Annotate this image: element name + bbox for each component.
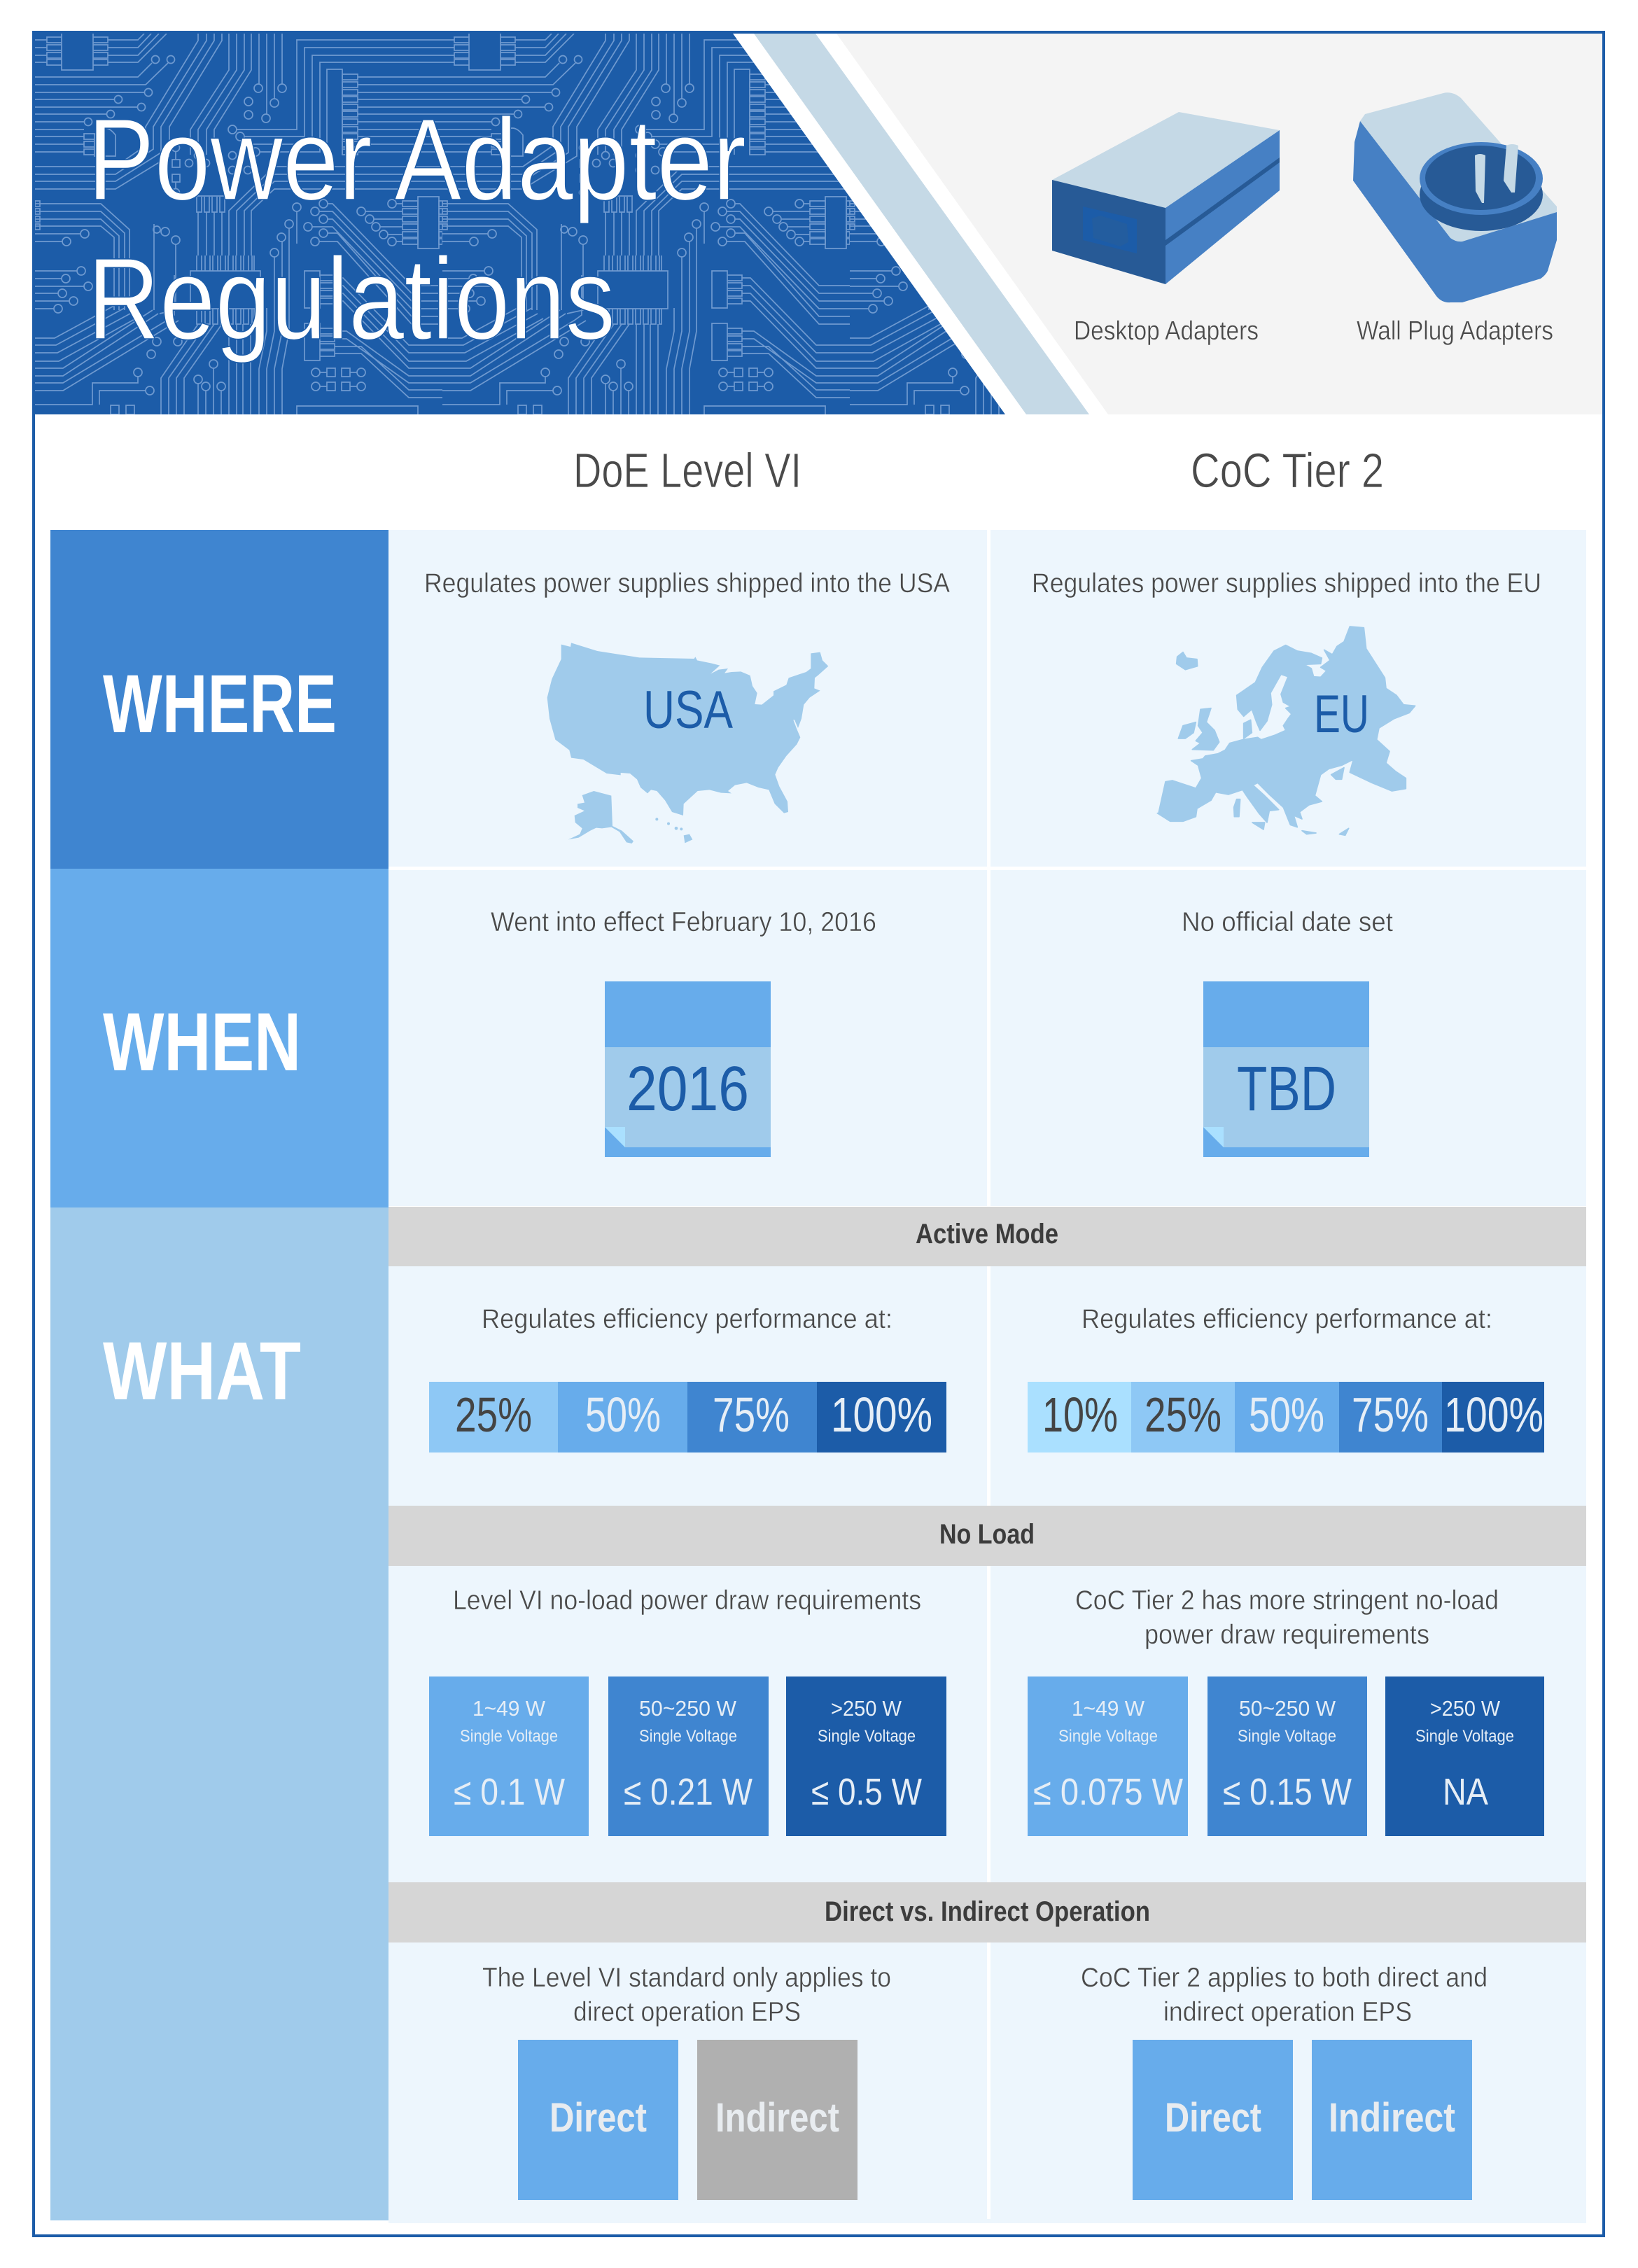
panel: where label xyxy=(50,530,388,869)
card: DoE direct: Direct xyxy=(550,2095,647,2141)
active text: CoC: Regulates efficiency performance at: xyxy=(1082,1304,1492,1334)
card: DoE 50-250 W: Single Voltage xyxy=(639,1727,737,1746)
white diagonal band xyxy=(733,34,1108,414)
card: CoC over 250 W: Single Voltage xyxy=(1415,1727,1514,1746)
card: CoC 50-250 W: ≤ 0.15 W xyxy=(1223,1771,1352,1813)
map: USA xyxy=(547,643,828,844)
column heading: DoE Level VI: DoE Level VI xyxy=(573,443,802,498)
header light panel xyxy=(35,34,1602,414)
chart: DoE load points: 50% xyxy=(585,1387,661,1442)
card: CoC direct xyxy=(1133,2040,1293,2200)
panel: what label: WHAT xyxy=(103,1325,301,1418)
card: DoE over 250 W: >250 W xyxy=(831,1696,902,1721)
circuit board background xyxy=(35,34,1005,414)
section bar: no load xyxy=(388,1506,1586,1566)
card: CoC 50-250 W: Single Voltage xyxy=(1238,1727,1336,1746)
icon: wall plug adapter xyxy=(1353,92,1557,302)
no-load text: CoC: power draw requirements xyxy=(1144,1620,1429,1650)
chart: CoC load points xyxy=(1028,1382,1544,1452)
card: CoC 1-49 W: 1~49 W xyxy=(1072,1696,1145,1721)
card: CoC over 250 W xyxy=(1385,1676,1544,1836)
map: EU xyxy=(1157,626,1415,835)
operation text: CoC: indirect operation EPS xyxy=(1163,1997,1412,2027)
card: CoC 1-49 W: Single Voltage xyxy=(1058,1727,1158,1746)
label: wall plug adapters: Wall Plug Adapters xyxy=(1357,316,1553,346)
operation text: DoE xyxy=(482,1963,891,2027)
when text: DoE: Went into effect February 10, 2016 xyxy=(491,907,876,937)
section bar: direct vs indirect xyxy=(388,1882,1586,1942)
operation text: CoC: CoC Tier 2 applies to both direct and xyxy=(1081,1963,1488,1993)
card: DoE 50-250 W: 50~250 W xyxy=(639,1696,737,1721)
icon: calendar 2016: 2016 xyxy=(626,1054,749,1124)
card: CoC 50-250 W xyxy=(1208,1676,1367,1836)
card: DoE over 250 W: ≤ 0.5 W xyxy=(811,1771,922,1813)
card: CoC 1-49 W: ≤ 0.075 W xyxy=(1033,1771,1183,1813)
where text: CoC: Regulates power supplies shipped into the EU xyxy=(1032,568,1541,598)
title: Power Adapter xyxy=(88,95,746,225)
card: CoC direct: Direct xyxy=(1165,2095,1261,2141)
section bar: no load: No Load xyxy=(939,1519,1035,1550)
chart: DoE load points xyxy=(429,1382,946,1452)
operation text: CoC xyxy=(1081,1963,1488,2027)
section bar: direct vs indirect: Direct vs. Indirect Operation xyxy=(825,1896,1150,1927)
title: Regulations xyxy=(88,234,615,364)
card: CoC over 250 W: NA xyxy=(1443,1771,1488,1813)
chart: CoC load points: 75% xyxy=(1352,1387,1429,1442)
active text: DoE: Regulates efficiency performance at: xyxy=(482,1304,892,1334)
card: CoC indirect: Indirect xyxy=(1329,2095,1455,2141)
where text: DoE: Regulates power supplies shipped into the USA xyxy=(424,568,950,598)
card: DoE 50-250 W: ≤ 0.21 W xyxy=(624,1771,752,1813)
card: CoC 1-49 W xyxy=(1028,1676,1188,1836)
panel: direct vs indirect xyxy=(388,1942,1586,2223)
panel: what label xyxy=(50,1208,388,2220)
card: DoE 1-49 W: 1~49 W xyxy=(472,1696,546,1721)
when text: CoC: No official date set xyxy=(1182,907,1393,937)
no-load text: DoE: Level VI no-load power draw requirements xyxy=(453,1586,921,1616)
section bar: active mode: Active Mode xyxy=(916,1219,1058,1250)
panel: when label xyxy=(50,869,388,1208)
no-load text: CoC: CoC Tier 2 has more stringent no-load xyxy=(1075,1586,1499,1616)
icon: calendar TBD xyxy=(1203,981,1369,1157)
map label: EU: EU xyxy=(1314,685,1369,744)
panel: where row xyxy=(388,530,1586,867)
card: DoE over 250 W xyxy=(786,1676,946,1836)
chart: DoE load points: 75% xyxy=(713,1387,790,1442)
panel: when row xyxy=(388,870,1586,1206)
icon: calendar 2016 xyxy=(605,981,771,1157)
card: DoE direct xyxy=(518,2040,678,2200)
icon: calendar TBD: TBD xyxy=(1237,1054,1336,1124)
card: CoC 50-250 W: 50~250 W xyxy=(1239,1696,1336,1721)
card: DoE indirect: Indirect xyxy=(715,2095,839,2141)
card: DoE 1-49 W: ≤ 0.1 W xyxy=(454,1771,565,1813)
no-load text: CoC xyxy=(1075,1586,1499,1650)
icon: desktop adapter xyxy=(1052,112,1280,284)
column heading: CoC Tier 2: CoC Tier 2 xyxy=(1191,443,1384,498)
card: CoC over 250 W: >250 W xyxy=(1430,1696,1501,1721)
card: CoC indirect xyxy=(1312,2040,1472,2200)
section bar: active mode xyxy=(388,1207,1586,1266)
chart: CoC load points: 25% xyxy=(1144,1387,1222,1442)
chart: DoE load points: 100% xyxy=(831,1387,932,1442)
card: DoE indirect xyxy=(697,2040,858,2200)
light blue diagonal stripe xyxy=(754,34,1089,414)
card: DoE over 250 W: Single Voltage xyxy=(818,1727,916,1746)
operation text: DoE: direct operation EPS xyxy=(573,1997,801,2027)
panel: no load xyxy=(388,1566,1586,1882)
chart: CoC load points: 10% xyxy=(1042,1387,1118,1442)
chart: CoC load points: 50% xyxy=(1249,1387,1324,1442)
chart: DoE load points: 25% xyxy=(455,1387,532,1442)
operation text: DoE: The Level VI standard only applies to xyxy=(482,1963,891,1993)
chart: CoC load points: 100% xyxy=(1444,1387,1544,1442)
label: desktop adapters: Desktop Adapters xyxy=(1074,316,1259,346)
title xyxy=(88,95,746,364)
panel: where label: WHERE xyxy=(103,658,337,750)
card: DoE 1-49 W xyxy=(429,1676,589,1836)
map label: USA: USA xyxy=(643,680,733,740)
header banner xyxy=(35,34,1602,414)
card: DoE 1-49 W: Single Voltage xyxy=(460,1727,558,1746)
card: DoE 50-250 W xyxy=(608,1676,769,1836)
panel: when label: WHEN xyxy=(103,996,301,1088)
panel: active mode xyxy=(388,1266,1586,1506)
